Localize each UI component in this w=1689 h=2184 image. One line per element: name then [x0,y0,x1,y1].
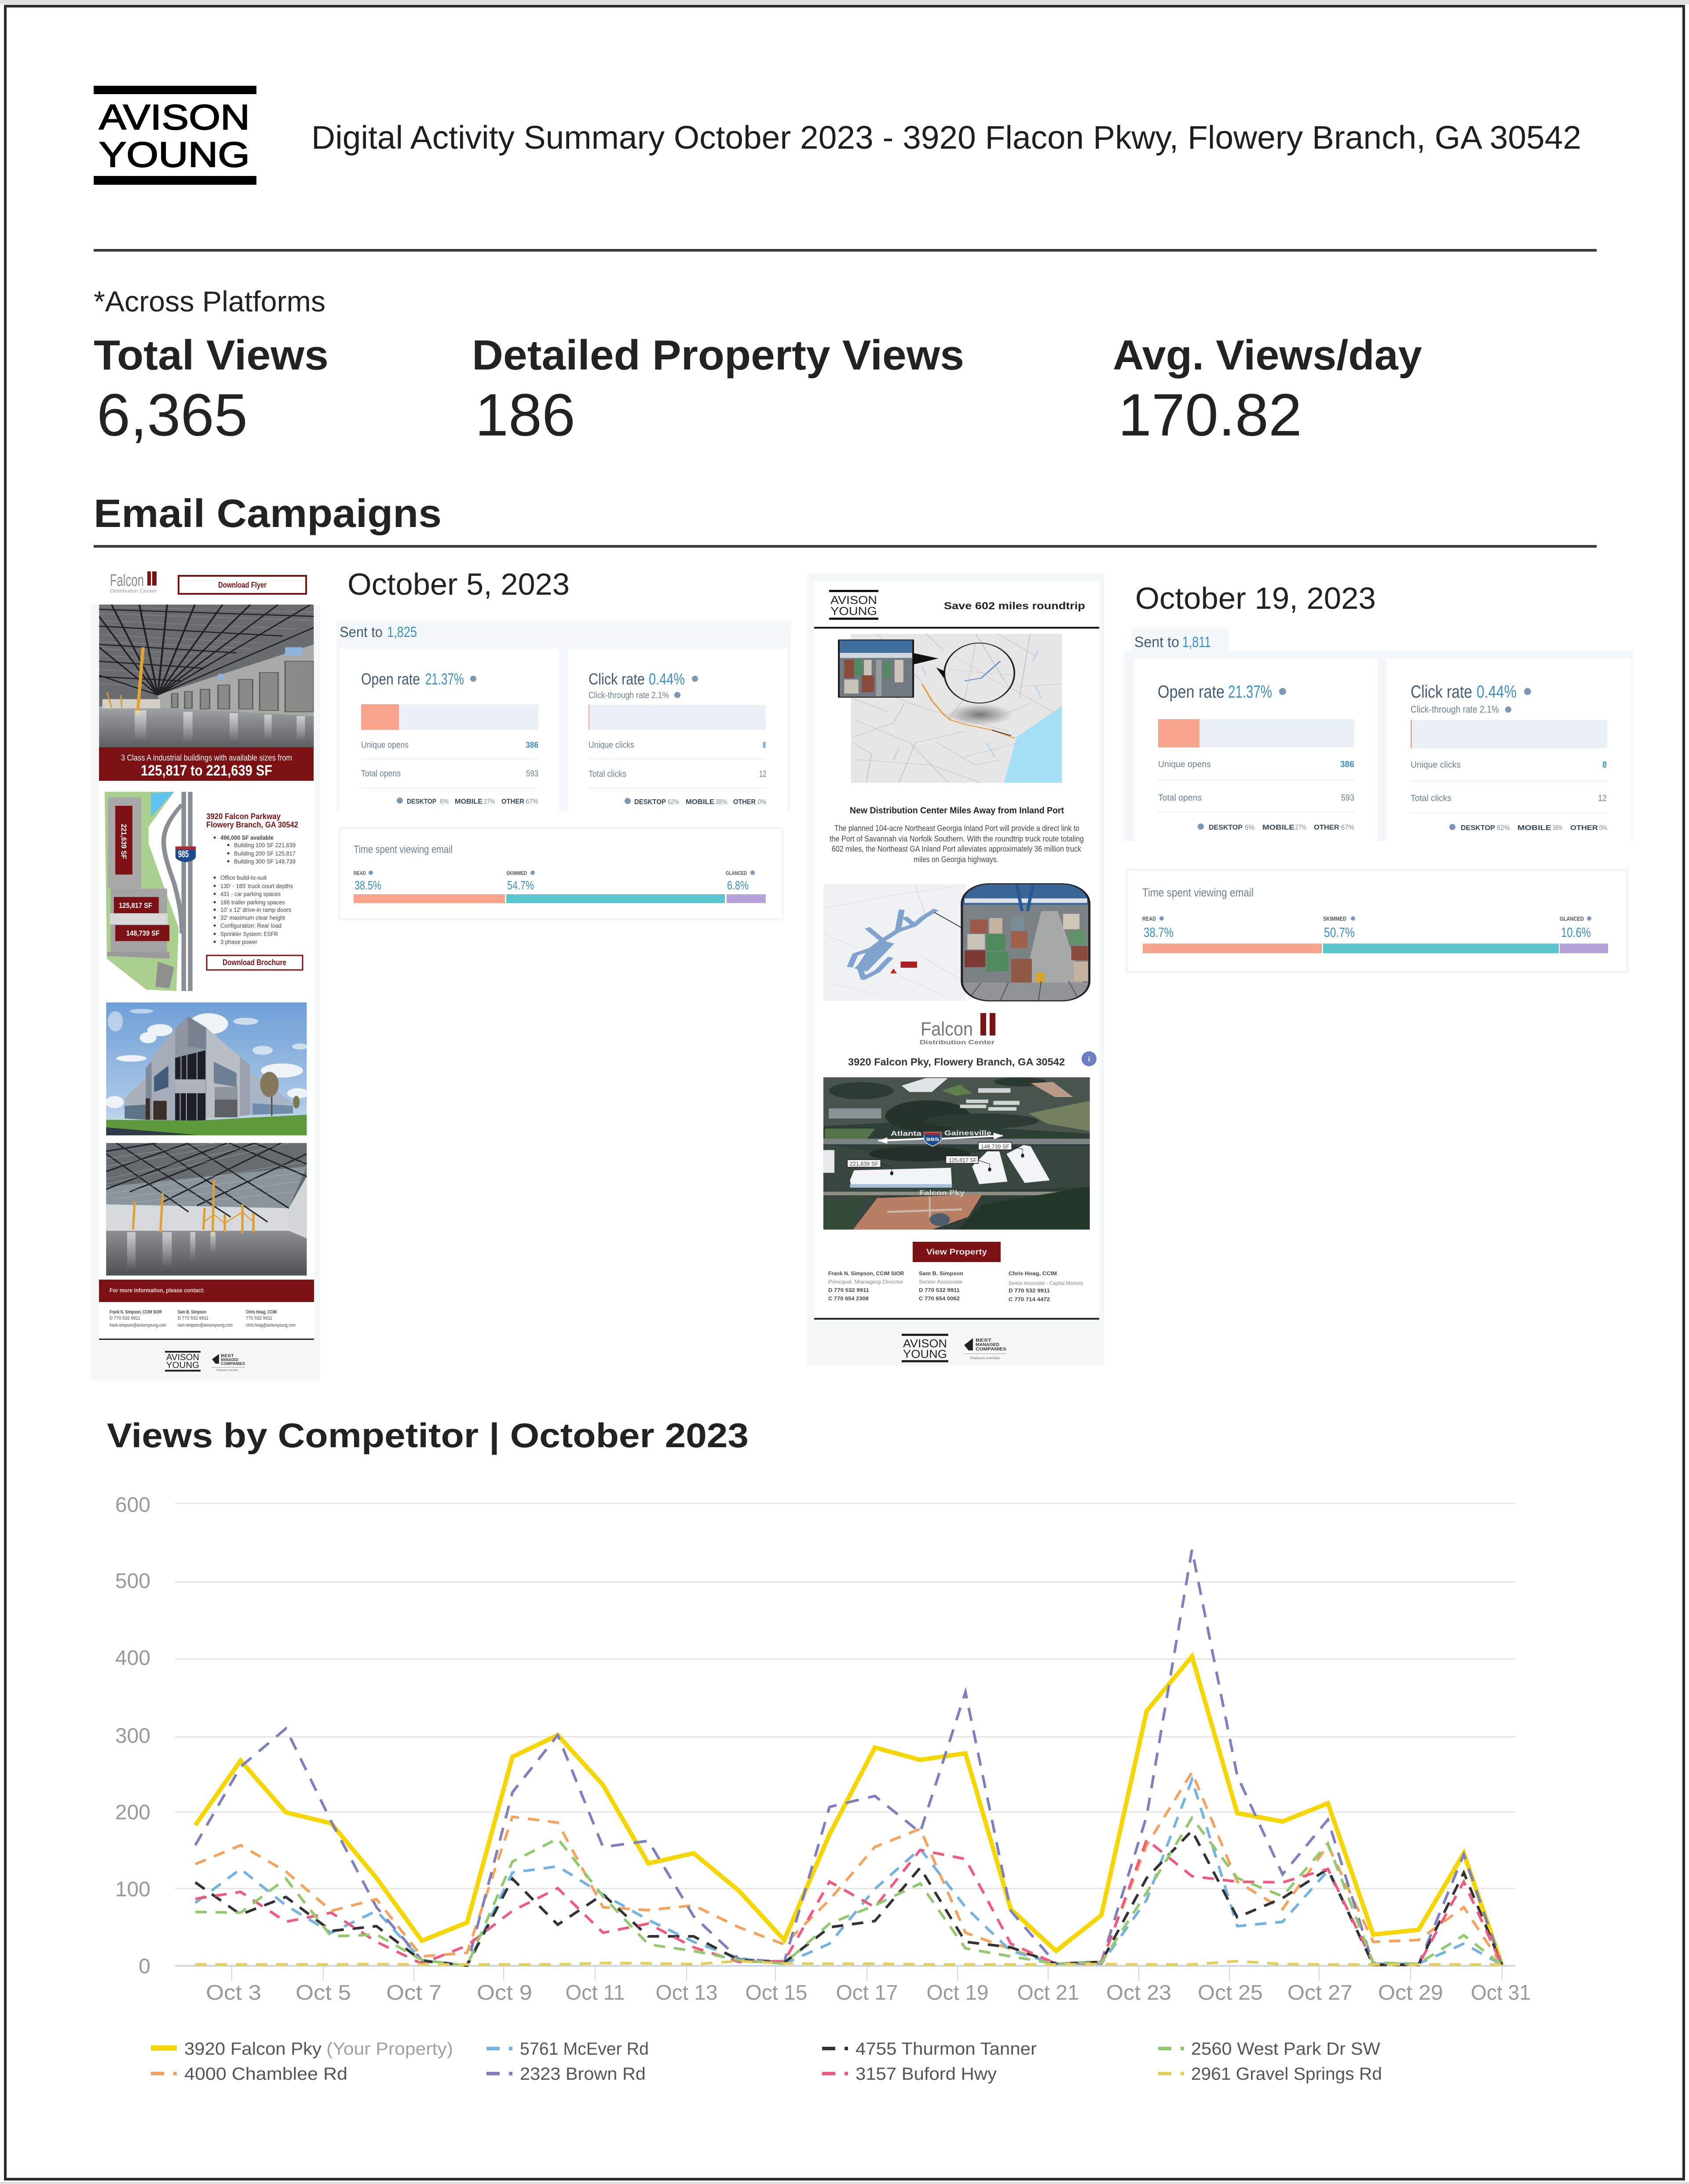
contact details: Chris Hoag, CCIM [246,1310,277,1315]
property feature list: Configuration: Rear load [220,922,282,929]
legend: 3157 Buford Hwy: 3157 Buford Hwy [855,2064,997,2084]
article body: miles on Georgia highways. [914,855,998,864]
photo: aerial site view: 125,817 SF [949,1157,977,1163]
logo: Avison Young: AVISON [99,98,250,137]
sent count: 1,811 [1182,634,1211,651]
property feature list: Sprinkler System: ESFR [220,930,278,937]
card: open rate: Total opens [361,769,401,779]
stat: detailed property views: 186 [475,381,575,448]
article heading: New Distribution Center Miles Away from Inland Port [850,806,1064,816]
card: open rate: Open rate [361,670,420,688]
contact details: D 770 532 9911 [1009,1288,1050,1294]
contact details: C 770 714 4472 [1009,1296,1050,1302]
footer logos: BEST [221,1354,234,1358]
banner: available sizes [99,747,314,781]
series: 3920 Falcon Pky [195,1656,1502,1965]
panel: flyer email preview, October 5 [91,571,320,1380]
y axis labels and grid: 400 [115,1646,150,1670]
stat: average views per day: 170.82 [1118,381,1302,448]
x axis with ticks and date labels: Oct 9 [477,1981,532,2005]
falcon II logo: Falcon [110,571,144,590]
contact details: C 770 654 0062 [919,1295,960,1302]
photo: aerial site view: 985 [926,1137,939,1142]
site plan [105,792,196,991]
contact details: Frank N. Simpson, CCIM SIOR [828,1270,904,1277]
note: across platforms: *Across Platforms [94,285,325,318]
footer logos: YOUNG [903,1347,947,1361]
footer logos: COMPANIES [976,1347,1006,1352]
card: open rate: 593 [1341,793,1354,803]
photo: aerial site view: Gainesville [944,1130,991,1137]
button: download flyer [179,576,306,594]
x axis with ticks and date labels: Oct 11 [566,1981,625,2005]
sent count [340,624,417,640]
property feature list: Building 300 SF 148,739 [234,858,296,865]
card: open rate: DESKTOP [1209,824,1243,831]
contact details: chris.hoag@avisonyoung.com [246,1323,296,1328]
contact details: D 770 532 9911 [178,1316,208,1321]
heading: views by competitor: Views by Competitor | October 2023 [107,1416,749,1455]
card: open rate: 67% [526,798,538,805]
data series lines [195,1550,1502,1965]
site plan: 125,817 SF [119,901,152,910]
panel: metrics October 19 [1123,628,1633,841]
series: 2961 Gravel Springs Rd [195,1961,1502,1965]
button: download flyer: Download Flyer [218,581,267,589]
card: click rate: 12 [1598,794,1607,803]
banner: contact prompt: For more information, please contact: [110,1287,205,1294]
legend: 4755 Thurmon Tanner: 4755 Thurmon Tanner [855,2039,1037,2059]
banner: contact prompt [99,1280,314,1302]
contact details: sam.simpson@avisonyoung.com [178,1323,233,1328]
line chart: views by competitor [115,1493,1531,2005]
photo: aerial site view: Falcon Pky [919,1189,965,1197]
map: route to savannah [839,634,1062,783]
x axis with ticks and date labels [175,1965,1531,2005]
card: click rate: 38% [715,798,727,806]
y axis labels and grid: 100 [115,1878,150,1901]
falcon II logo [920,1013,995,1046]
card: click rate: 0% [758,798,766,806]
map: lake and rail yard photo [823,884,1089,1001]
legend: 3920 Falcon Pky [151,2039,453,2059]
chart legend [151,2039,1382,2084]
panel: time spent October 5: 54.7% [507,878,534,892]
card: open rate: 27% [1295,824,1306,831]
article body: 602 miles, the Northeast GA Inland Port alleviates approximately 36 million truck [832,845,1082,853]
site plan: 985 [178,849,189,860]
legend: 4000 Chamblee Rd: 4000 Chamblee Rd [184,2064,347,2084]
y axis labels and grid: 200 [115,1801,150,1824]
article body: The planned 104-acre Northeast Georgia Inland Port will provide a direct link to [834,824,1079,833]
property feature list: 32' maximum clear height [220,914,285,921]
x axis with ticks and date labels: Oct 31 [1471,1981,1531,2005]
date: October 5, 2023: October 5, 2023 [347,567,570,601]
footer logos: MANAGED [221,1357,238,1362]
panel: time spent October 19: Time spent viewing email [1142,886,1254,899]
panel: time spent October 19: SKIMMED [1323,915,1346,922]
card: click rate: 62% [1497,824,1510,832]
falcon II logo: Distribution Center [920,1039,995,1046]
contact details: frank.simpson@avisonyoung.com [110,1323,166,1328]
panel: time spent October 19 [1127,870,1627,972]
legend: 2323 Brown Rd: 2323 Brown Rd [520,2064,646,2084]
card: open rate: MOBILE [1262,824,1294,831]
card: click rate: 0.44% [649,670,685,688]
contact details [828,1270,1083,1302]
card: open rate: 386 [526,741,538,750]
contact details: Senior Associate [919,1279,962,1285]
card: click rate [568,649,787,812]
panel: time spent October 5: GLANCED [726,870,747,876]
legend: 3920 Falcon Pky: (Your Property) [326,2039,453,2059]
property address [206,812,298,829]
card: click rate: Click rate [1411,682,1472,702]
legend: 3920 Falcon Pky: 3920 Falcon Pky [184,2039,322,2059]
photo: empty warehouse [106,1143,307,1276]
card: click rate: 12 [759,769,766,779]
property feature list: 496,000 SF available [220,834,274,841]
photo: aerial site view [823,1077,1090,1229]
logo and subject: YOUNG [830,604,877,618]
photo: aerial site view: 221,639 SF [850,1160,878,1167]
series: 2323 Brown Rd [195,1550,1502,1965]
falcon II logo: Distribution Center [110,589,157,594]
falcon II logo: Falcon [921,1018,973,1040]
article body [830,824,1084,864]
x axis with ticks and date labels: Oct 19 [926,1981,989,2005]
x axis with ticks and date labels: Oct 23 [1106,1981,1171,2005]
photo: warehouse interior [99,604,314,747]
footer logos: AVISON [166,1353,199,1362]
panel: time spent October 5 [340,828,782,919]
card: open rate: Unique opens [1158,760,1211,769]
panel: inland port email preview, October 19 [807,574,1104,1366]
footer logos: AVISON [903,1337,947,1350]
card: open rate: 386 [1340,760,1354,769]
panel: time spent October 5: READ [354,870,366,876]
card: open rate: Open rate [1158,682,1225,702]
panel: time spent October 5: SKIMMED [506,870,527,876]
card: click rate: 62% [668,798,679,806]
contact details: Sam B. Simpson [178,1310,206,1315]
sent count: 1,825 [387,624,417,640]
stat: total views: 6,365 [97,381,248,448]
button: download brochure: Download Brochure [223,958,286,967]
card: open rate: Total opens [1158,793,1202,803]
contact details: Senior Associate - Capital Markets [1009,1280,1083,1286]
contact details: D 770 532 9911 [110,1316,140,1321]
x axis with ticks and date labels: Oct 13 [655,1981,718,2005]
footer logos: YOUNG [166,1361,199,1370]
x axis with ticks and date labels: Oct 25 [1198,1981,1263,2005]
property feature list: Office build-to-suit [220,874,267,881]
footer logos: COMPANIES [221,1361,245,1366]
card: open rate: 6% [440,798,449,805]
card: open rate [340,649,559,812]
stat: detailed property views: Detailed Property Views [472,332,964,379]
card: open rate: 21.37% [1228,682,1272,702]
x axis with ticks and date labels: Oct 7 [386,1981,442,2005]
card: open rate: 67% [1341,824,1354,831]
card: click rate: Click-through rate 2.1% [589,691,669,700]
x axis with ticks and date labels: Oct 5 [296,1981,351,2005]
panel: time spent October 5: 6.8% [727,878,749,892]
sent count: Sent to [340,624,383,640]
card: open rate: 27% [484,798,495,805]
card: click rate: 0.44% [1477,682,1517,702]
panel: metrics October 5 [336,621,791,812]
footer logos [902,1334,1006,1362]
series: 2560 West Park Dr SW [195,1818,1502,1965]
card: click rate: 8 [763,741,766,750]
contact details: C 770 654 2308 [828,1295,869,1302]
card: click rate: 0% [1599,824,1607,832]
card: open rate: DESKTOP [407,798,436,805]
footer logos: Platinum member [970,1356,1000,1360]
date: October 19, 2023: October 19, 2023 [1135,581,1376,615]
card: click rate: Unique clicks [1411,760,1461,770]
property feature list: 166 trailer parking spaces [220,899,285,906]
panel: time spent October 19: 50.7% [1324,925,1355,940]
photo: aerial site view: Atlanta [891,1130,921,1138]
property feature list: 130' - 185' truck court depths [220,882,293,889]
y axis labels and grid: 0 [139,1955,150,1978]
panel: time spent October 19: GLANCED [1560,915,1584,922]
legend: 5761 McEver Rd: 5761 McEver Rd [520,2039,649,2059]
y axis labels and grid: 300 [115,1724,150,1748]
logo: Avison Young: YOUNG [99,135,250,175]
property address: 3920 Falcon Parkway [206,812,281,821]
panel: time spent October 19: 10.6% [1561,925,1591,940]
card: open rate: 6% [1245,824,1254,831]
card: click rate: 8 [1602,760,1607,770]
heading: email campaigns: Email Campaigns [94,492,442,536]
site plan: 221,639 SF [120,824,128,859]
button: view property [913,1242,1001,1262]
card: click rate: MOBILE [686,798,714,806]
property feature list: Building 100 SF 221,639 [234,841,296,849]
footer logos: MANAGED [976,1343,999,1347]
banner: available sizes: 3 Class A industrial buildings with available sizes from [121,754,292,763]
y axis labels and grid [115,1493,1515,1978]
legend: 2961 Gravel Springs Rd: 2961 Gravel Springs Rd [1191,2064,1382,2084]
contact details: Frank N. Simpson, CCIM SIOR [110,1310,162,1315]
logo and subject [814,590,1099,629]
contact details: Principal, Managing Director [828,1279,903,1285]
stat: total views [94,332,329,448]
icon: info badge [1082,1051,1097,1066]
card: click rate: OTHER [733,798,756,806]
card: click rate: Total clicks [589,769,626,779]
y axis labels and grid: 500 [115,1569,150,1593]
contact details [110,1310,296,1328]
card: open rate [1134,658,1378,841]
title: Digital Activity Summary October 2023 - 3920 Flacon Pkwy, Flowery Branch, GA 30542 [311,119,1581,156]
card: click rate: OTHER [1570,824,1598,832]
property feature list: 3 phase power [220,938,257,945]
legend: 2560 West Park Dr SW: 2560 West Park Dr SW [1191,2039,1380,2059]
x axis with ticks and date labels: Oct 15 [745,1981,808,2005]
footer logos: Platinum member [216,1369,239,1372]
x axis with ticks and date labels: Oct 17 [836,1981,898,2005]
contact details: 770 532 9911 [246,1316,272,1321]
card: open rate: Unique opens [361,740,409,750]
button: view property: View Property [926,1247,987,1256]
sent count [1134,634,1211,651]
logo and subject: Save 602 miles roundtrip [944,600,1085,611]
property feature list: 431 - car parking spaces [220,890,281,897]
logo and subject: AVISON [830,593,877,607]
series: 5761 McEver Rd [195,1780,1502,1965]
card: click rate: Unique clicks [589,740,634,750]
contact details: Sam B. Simpson [919,1270,963,1277]
panel: time spent October 5: Time spent viewing email [354,844,453,856]
property feature list [214,834,296,945]
property address: 3920 Falcon Pky, Flowery Branch, GA 30542 [848,1056,1065,1068]
property feature list: 10' x 12' drive-in ramp doors [220,906,291,913]
y axis labels and grid: 600 [115,1493,150,1517]
card: click rate: DESKTOP [634,798,666,806]
card: click rate: Total clicks [1411,794,1451,803]
footer logos: BEST [976,1338,991,1343]
photo: building exterior [105,1002,309,1135]
article body: the Port of Savannah via Norfolk Southern. With the roundtrip truck route totaling [830,834,1084,843]
property feature list: Building 200 SF 125,817 [234,850,296,857]
photo: aerial site view: 148,739 SF [981,1143,1009,1150]
card: click rate: MOBILE [1517,824,1551,832]
panel: time spent October 19: READ [1142,915,1156,922]
contact details: D 770 532 9911 [919,1287,960,1293]
series: 4755 Thurmon Tanner [195,1831,1502,1965]
card: open rate: OTHER [1314,824,1339,831]
logo: Avison Young [94,86,256,185]
x axis with ticks and date labels: Oct 29 [1378,1981,1443,2005]
card: click rate: Click-through rate 2.1% [1411,704,1499,715]
site plan: 148,739 SF [126,929,160,937]
card: open rate: MOBILE [455,798,483,805]
series: 3157 Buford Hwy [195,1840,1502,1965]
sent count: Sent to [1134,634,1179,651]
card: click rate: Click rate [589,670,645,688]
contact details: D 770 532 9911 [828,1287,869,1293]
property address: Flowery Branch, GA 30542 [206,820,298,829]
button: download brochure [207,955,303,970]
footer logos [165,1351,245,1372]
stat: average views per day [1113,332,1422,448]
x axis with ticks and date labels: Oct 27 [1287,1981,1353,2005]
contact details: Chris Hoag, CCIM [1009,1270,1057,1277]
stat: detailed property views [472,332,964,448]
banner: available sizes: 125,817 to 221,639 SF [141,762,272,779]
stat: total views: Total Views [94,332,329,379]
card: click rate [1387,658,1631,841]
panel: time spent October 5: 38.5% [355,878,381,892]
panel: time spent October 19: 38.7% [1144,925,1174,940]
series: 4000 Chamblee Rd [195,1772,1502,1965]
x axis with ticks and date labels: Oct 3 [206,1981,261,2005]
icon: info badge: i [1088,1056,1090,1063]
x axis with ticks and date labels: Oct 21 [1017,1981,1079,2005]
card: click rate: 38% [1553,824,1562,832]
card: open rate: OTHER [501,798,524,805]
card: click rate: DESKTOP [1461,824,1495,832]
stat: average views per day: Avg. Views/day [1113,332,1422,379]
card: open rate: 21.37% [425,670,464,688]
card: open rate: 593 [526,769,538,779]
